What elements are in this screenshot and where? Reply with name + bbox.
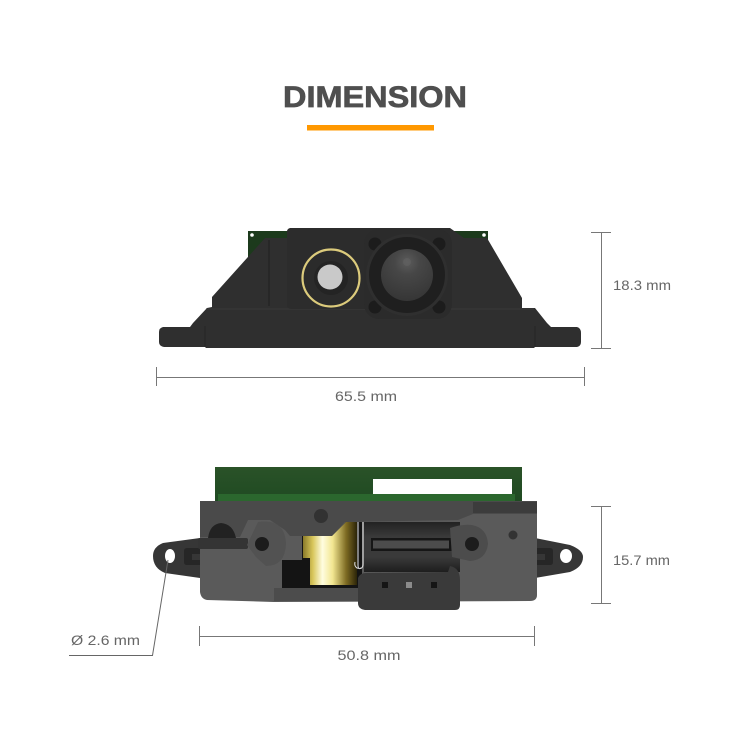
connector slot [371,538,452,551]
dimension: back height [591,506,670,604]
left screw boss [247,521,286,566]
right screw boss [450,525,488,561]
right mounting tab [535,538,583,578]
back view sensor [153,467,583,610]
dimension: back width [199,626,534,663]
left mounting tab [153,538,200,578]
leader: hole diameter [69,560,168,656]
title underline [307,125,434,130]
mounting hole left [165,549,175,563]
back PCB [215,467,522,502]
top screw recess [314,509,328,523]
brass cavity [282,522,362,588]
wire clip [355,522,363,569]
title: DIMENSION [283,81,467,114]
leader: hole diameter: Ø 2.6 mm [71,633,140,648]
dimension: back width: 50.8 mm [338,648,400,663]
gold lens ring [302,250,360,306]
dimension: back height: 15.7 mm [613,553,670,568]
front PCB [248,231,488,271]
mounting hole right [560,549,572,563]
left clip [198,523,248,549]
receiver lens [364,229,452,319]
connector [358,566,460,610]
dimension: front height: 18.3 mm [613,278,671,293]
dimension: front width [156,367,584,404]
front view sensor [159,228,581,348]
dimension: front height [591,232,671,348]
front housing [159,228,581,348]
dimension: front width: 65.5 mm [335,389,397,404]
right small recess [508,530,518,540]
back housing [184,501,553,602]
receiver barrel [364,522,460,572]
